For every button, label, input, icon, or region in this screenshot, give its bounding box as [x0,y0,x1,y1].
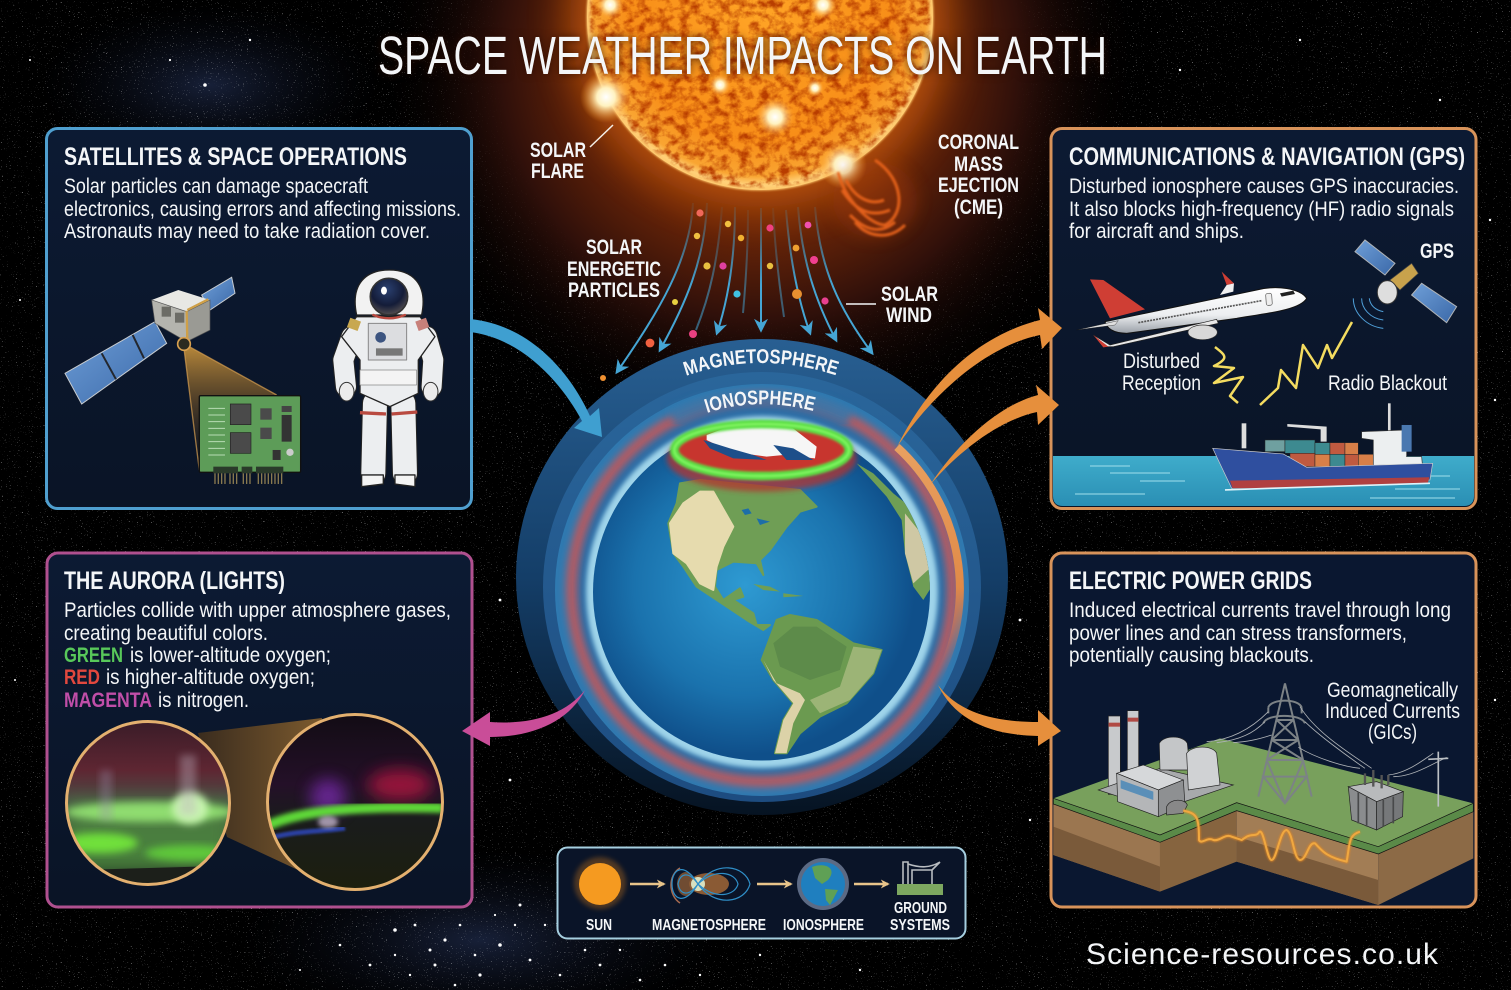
label: geomagnetically induced currents: Induced Currents [1325,700,1460,723]
legend labels: MAGNETOSPHERE [652,917,766,934]
icon: astronaut [339,270,438,487]
label: radio blackout: Radio Blackout [1328,372,1447,395]
legend labels: IONOSPHERE [783,917,864,934]
label: magnetosphere: MAGNETOSPHERE [682,349,840,376]
label: solar flare: FLARE [531,160,584,183]
panel: the aurora [47,553,472,907]
label: coronal mass ejection: (CME) [954,196,1003,219]
label: coronal mass ejection [938,131,1019,219]
body text: Solar particles can damage spacecraft [64,175,368,198]
body text: GREEN [64,644,123,667]
power lines [1207,707,1447,777]
panel: satellites and space operations [46,128,472,508]
heading: SATELLITES & SPACE OPERATIONS [64,143,407,171]
arrow: orange, to communications panel upper [897,308,1062,447]
sea [1053,456,1474,506]
arrow: orange, to power grid panel [938,685,1061,746]
illustration: power grid landscape [1053,683,1473,905]
body text: potentially causing blackouts. [1069,644,1314,667]
legend labels: SYSTEMS [890,917,950,934]
body text [64,599,451,712]
label: geomagnetically induced currents: Geomagnetically [1327,679,1458,702]
photo: aurora from ground [62,721,235,890]
transformer [1348,770,1403,830]
icon: airplane [1077,272,1307,347]
icon: earth [797,858,849,910]
label: solar energetic particles: PARTICLES [568,279,660,302]
label: ionosphere [704,390,816,413]
arrow [630,883,664,885]
ring: orange highlight [897,447,960,680]
title: SPACE WEATHER IMPACTS ON EARTH [378,26,1107,86]
label: disturbed reception: Disturbed [1123,350,1200,373]
heading: THE AURORA (LIGHTS) [64,567,285,595]
label: solar energetic particles: ENERGETIC [567,258,661,281]
arrow [854,883,888,885]
label: geomagnetically induced currents: (GICs) [1368,721,1417,744]
icon: satellite with circuit board [65,277,301,484]
body text: electronics, causing errors and affecting missions. [64,198,461,221]
body text: for aircraft and ships. [1069,220,1244,243]
body text: Induced electrical currents travel through long [1069,599,1451,622]
aurora oval [667,423,857,492]
body text: power lines and can stress transformers, [1069,622,1407,645]
arrow [757,883,791,885]
label: solar energetic particles [567,236,661,302]
legend labels: SUN [586,917,612,934]
label: solar wind: SOLAR [881,283,938,306]
label: GPS: GPS [1420,240,1454,263]
arrow: blue, to satellites panel [470,319,602,437]
solar wind arrows and particles [600,203,872,381]
body text: Particles collide with upper atmosphere gases, [64,599,451,622]
sun [570,0,950,238]
legend: chain from sun to ground systems [558,848,966,938]
heading: ELECTRIC POWER GRIDS [1069,567,1312,595]
icon: ground systems [897,862,943,895]
label: solar wind: WIND [886,304,932,327]
icon: magnetosphere [671,868,750,903]
panel: electric power grids [1051,553,1476,907]
arrow: orange, to communications panel lower [930,385,1059,485]
magnifier cone [198,718,322,870]
icon: GPS satellite [1353,240,1457,328]
label: geomagnetically induced currents [1325,679,1460,744]
body text: is higher-altitude oxygen; [106,666,315,689]
label: solar energetic particles: SOLAR [586,236,642,259]
label: coronal mass ejection: CORONAL [938,131,1019,154]
utility pole [1428,752,1448,807]
body text [64,175,461,243]
body text: Disturbed ionosphere causes GPS inaccuracies. [1069,175,1459,198]
body text: creating beautiful colors. [64,622,268,645]
icon: sun [574,857,626,909]
label: solar flare: SOLAR [530,139,586,162]
label: ionosphere: IONOSPHERE [704,390,816,413]
body text: RED [64,666,100,689]
panel: communications and navigation [1051,128,1476,508]
continents [668,463,932,753]
label: coronal mass ejection: EJECTION [938,174,1019,197]
label: disturbed reception: Reception [1122,372,1201,395]
label: solar wind [846,283,938,327]
label: solar flare [530,125,613,183]
icon: radio blackout signal [1260,322,1352,405]
fossil power plant [1098,711,1233,817]
body text: is nitrogen. [158,689,249,712]
icon: cargo ship [1213,403,1433,490]
icon: disturbed signal [1214,347,1243,403]
body text: is lower-altitude oxygen; [130,644,331,667]
body text [1069,175,1459,243]
label: coronal mass ejection: MASS [954,153,1003,176]
pylon [1258,683,1312,803]
body text [1069,599,1451,667]
body text: It also blocks high-frequency (HF) radio signals [1069,198,1454,221]
legend labels: GROUND [894,900,947,917]
photo: aurora from orbit [267,714,443,890]
body text: Astronauts may need to take radiation cover. [64,220,430,243]
Earth with atmosphere layers [516,339,1008,815]
credit: website: Science-resources.co.uk [1086,938,1439,971]
body text: MAGENTA [64,689,152,712]
label: disturbed reception [1122,350,1201,395]
legend labels [586,900,950,934]
arrow: magenta, to aurora panel [462,690,585,746]
induced current [1183,811,1360,862]
